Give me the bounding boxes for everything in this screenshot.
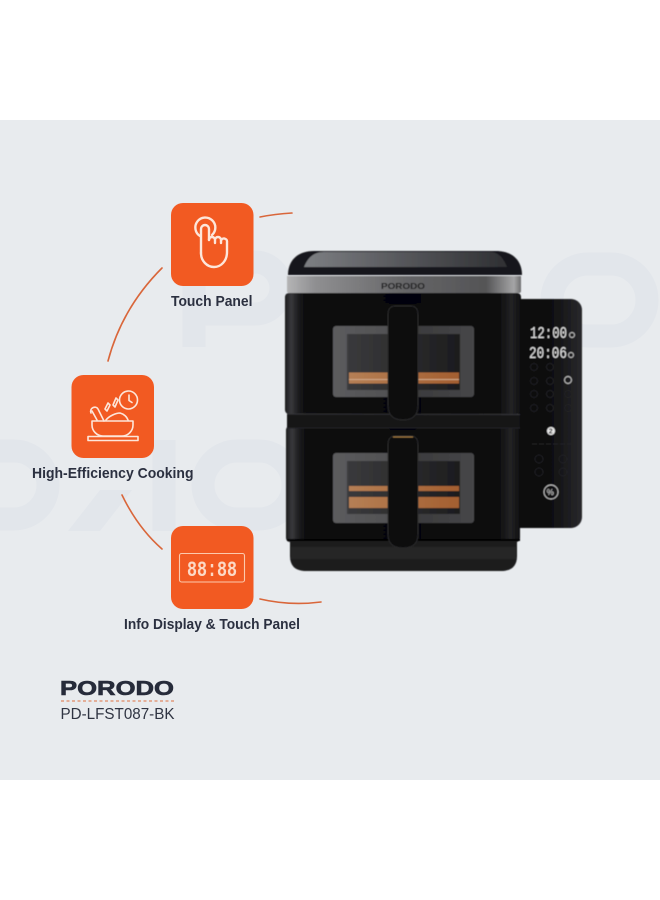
lower handle — [381, 430, 425, 548]
card: info display and touch panel — [124, 526, 300, 633]
upper body — [285, 293, 521, 414]
level indicator — [547, 427, 555, 435]
watermark: brand lettering — [0, 262, 647, 531]
label: Info Display & Touch Panel: Info Display & Touch Panel — [124, 616, 300, 633]
lit indicators — [544, 332, 574, 499]
watermark: letter leg — [68, 490, 132, 531]
connector arc: lower left — [122, 495, 162, 549]
lower window — [333, 453, 474, 523]
icon: bowl and clock — [88, 391, 138, 440]
label: High-Efficiency Cooking: High-Efficiency Cooking — [32, 465, 194, 482]
upper window — [333, 326, 474, 397]
side control panel: % — [547, 488, 554, 497]
connector arc: top — [260, 213, 292, 217]
lower body — [286, 426, 520, 542]
base — [290, 540, 517, 571]
steel band — [287, 276, 521, 293]
icon: pointing hand — [195, 218, 227, 267]
brand on band: PORODO — [381, 281, 425, 291]
product: air fryer — [285, 251, 582, 571]
side control panel: 2 — [549, 429, 553, 436]
icon: digital display — [180, 554, 244, 583]
lid — [288, 251, 522, 275]
card: touch panel — [171, 203, 254, 310]
brand logo: PORODO — [60, 678, 174, 700]
icon: digital display: 88:88 — [187, 558, 237, 583]
model number: PD-LFST087-BK — [60, 706, 175, 723]
connector arc: bottom — [260, 599, 321, 603]
panel buttons — [530, 364, 572, 476]
label: Touch Panel: Touch Panel — [171, 293, 252, 310]
connector arc: upper left — [108, 268, 162, 361]
upper handle — [381, 304, 425, 420]
seam — [287, 414, 520, 428]
brand block — [60, 678, 175, 723]
background panel — [0, 120, 660, 780]
card: high-efficiency cooking — [32, 375, 194, 482]
display readouts: 12:00 — [530, 325, 567, 344]
display readouts — [529, 325, 567, 364]
display readouts: 20:06 — [529, 345, 567, 364]
side control panel — [518, 299, 582, 528]
